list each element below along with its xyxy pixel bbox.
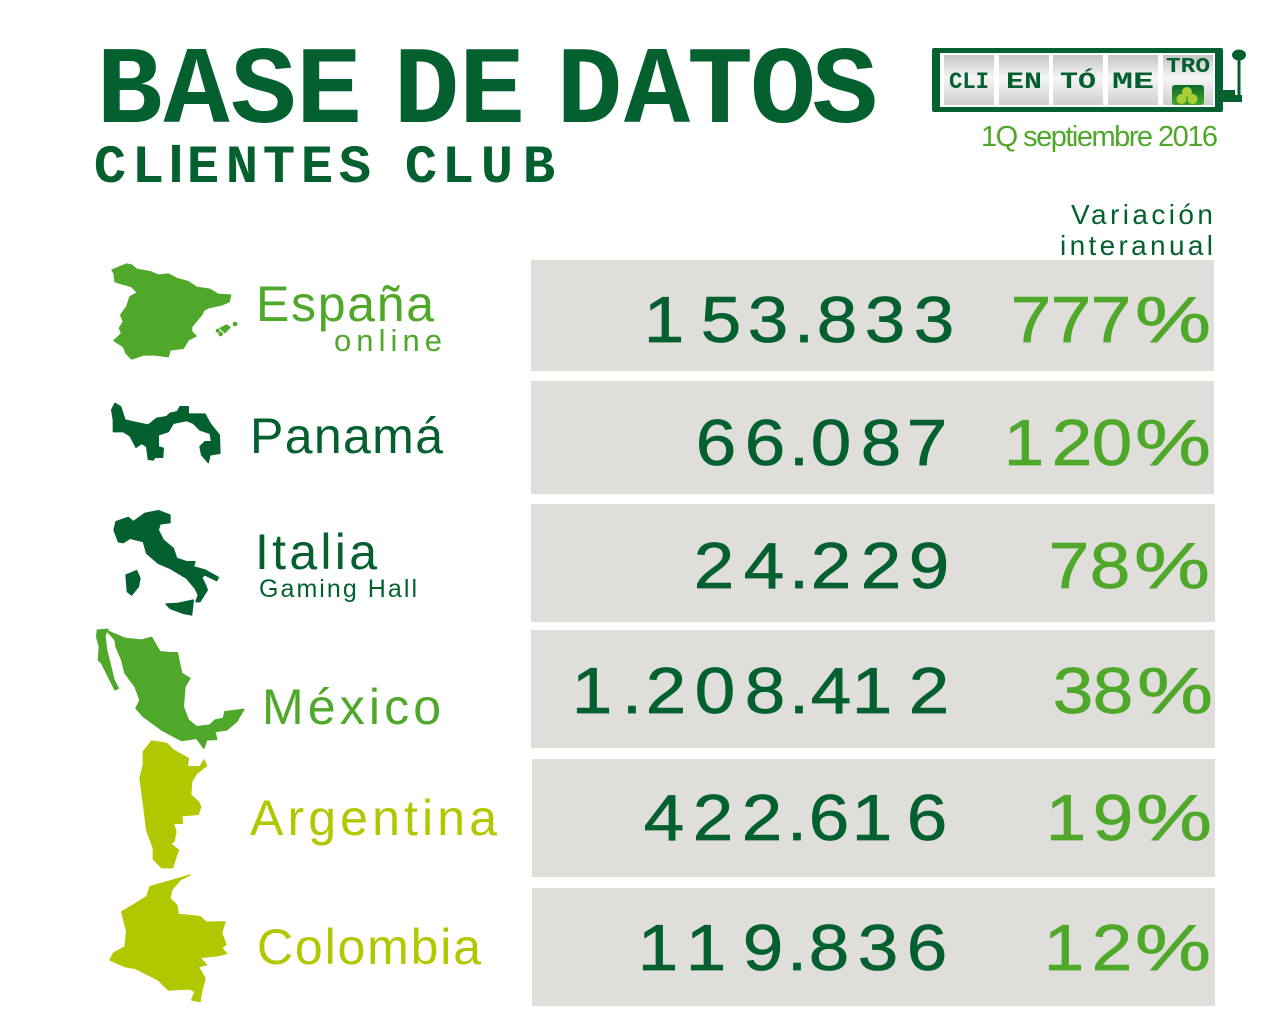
label: Italia: Italia [255, 524, 377, 580]
value: Colombia: 119.836 [638, 912, 947, 984]
change: Panamá: % [1135, 406, 1211, 479]
change: España [1011, 283, 1211, 356]
logo: slot machine [932, 48, 1246, 112]
change: Colombia: 12 [1044, 912, 1132, 984]
logo: slot machine: TÓ [1060, 67, 1096, 95]
label: Argentina: Argentina [250, 790, 497, 846]
label: Colombia: Colombia [257, 919, 481, 975]
date: 1Q septiembre 2016 [981, 121, 1218, 153]
logo: slot machine: TRO [1166, 56, 1210, 79]
map: Colombia [110, 875, 227, 1002]
map: Panamá [112, 403, 220, 463]
map: Argentina [140, 741, 207, 868]
change: Panamá: 120 [1004, 407, 1132, 479]
logo: slot machine: ME [1112, 69, 1154, 95]
change: México: 38 [1053, 655, 1133, 727]
change: Argentina: % [1136, 781, 1212, 854]
change: España: 777 [1011, 284, 1131, 356]
value: Panamá: 66.087 [696, 407, 947, 479]
title: BASE DE DATOS [96, 31, 878, 156]
map: México [97, 629, 244, 748]
change: Argentina: 19 [1046, 782, 1133, 854]
value: México: 1.208.412 [572, 655, 949, 727]
change: Italia: 78 [1049, 530, 1130, 602]
subtitle: CLIENTES CLUB [94, 134, 555, 199]
change: México: % [1137, 654, 1213, 727]
change: Colombia [1044, 911, 1211, 984]
change: México [1053, 654, 1213, 727]
panel: Colombia [532, 888, 1215, 1006]
value: Italia: 24.229 [694, 530, 949, 602]
logo: slot machine: EN [1006, 69, 1042, 95]
label: Panamá: Panamá [250, 408, 443, 464]
change: España: % [1135, 283, 1211, 356]
label: México: México [262, 679, 441, 735]
map: España [112, 264, 237, 359]
column heading: Variación [1071, 199, 1213, 230]
panel: Argentina [532, 759, 1215, 877]
map: Italia [114, 511, 218, 615]
value: Argentina: 422.616 [644, 782, 947, 854]
label: online: online [334, 323, 442, 358]
logo: slot machine: CLI [949, 69, 989, 95]
column heading [1060, 199, 1213, 261]
panel: Panamá [531, 381, 1214, 494]
panel: España [531, 260, 1214, 371]
column heading: interanual [1060, 230, 1213, 261]
change: Italia: % [1134, 529, 1210, 602]
change: Colombia: % [1135, 911, 1211, 984]
value: España: 153.833 [644, 284, 954, 356]
label: España: España [256, 276, 434, 332]
change: Panamá [1004, 406, 1211, 479]
change: Italia [1049, 529, 1210, 602]
label: Gaming Hall: Gaming Hall [259, 575, 417, 603]
panel: Italia [531, 504, 1215, 622]
change: Argentina [1046, 781, 1212, 854]
panel: México [531, 630, 1215, 748]
